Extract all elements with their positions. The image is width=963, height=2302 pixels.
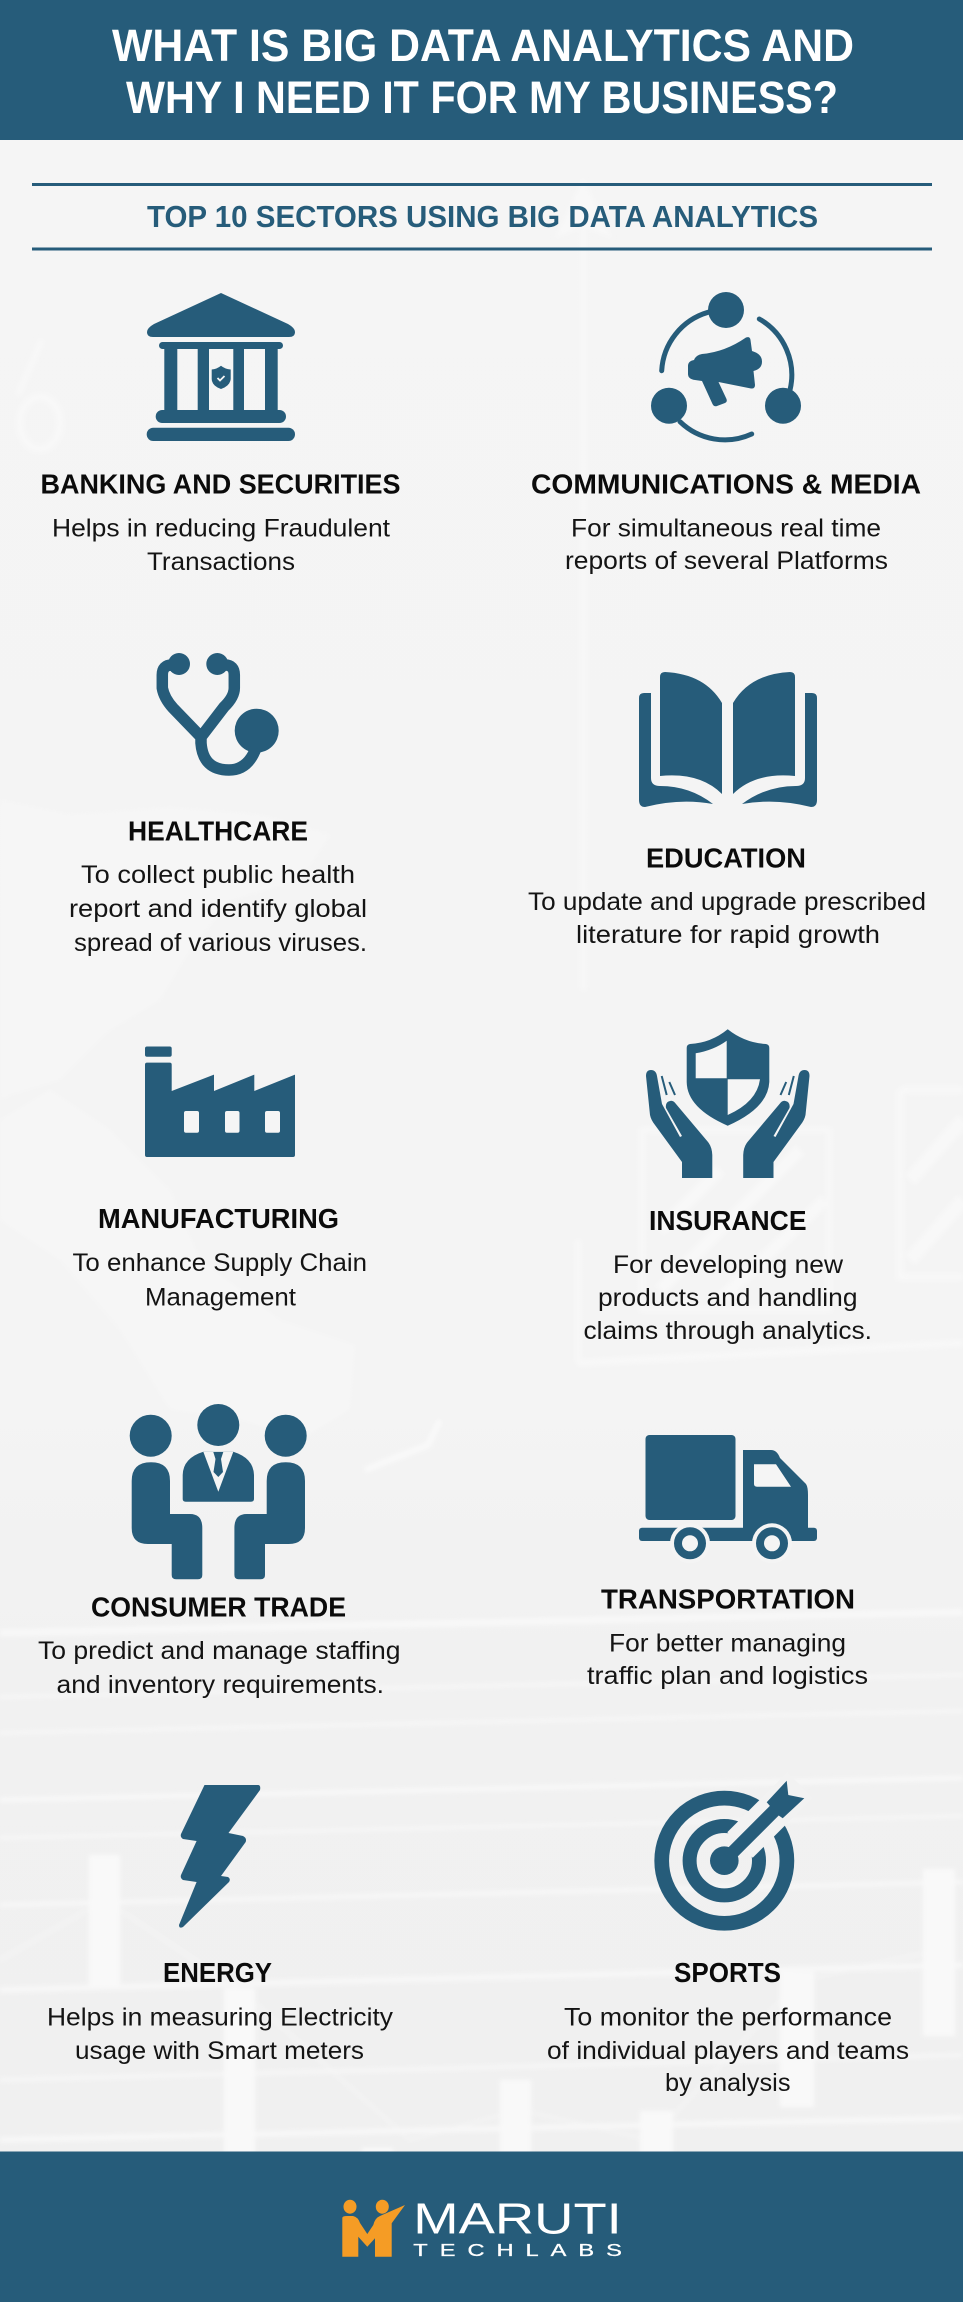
- description: traffic plan and logistics: [587, 1662, 868, 1690]
- title: [112, 20, 854, 123]
- description: To predict and manage staffing: [38, 1637, 400, 1665]
- description: spread of various viruses.: [74, 929, 367, 957]
- panel: communications and media: [531, 292, 921, 575]
- description: [565, 514, 888, 575]
- description: products and handling: [598, 1284, 858, 1312]
- icon: lightning bolt: [179, 1785, 260, 1928]
- icon: target with arrow: [662, 1781, 804, 1923]
- description: reports of several Platforms: [565, 547, 888, 575]
- heading: SPORTS: [674, 1957, 781, 1988]
- icon: stethoscope: [162, 653, 279, 770]
- description: For developing new: [613, 1251, 844, 1279]
- icon: shield held by hands: [646, 1029, 810, 1178]
- description: claims through analytics.: [584, 1317, 872, 1345]
- wordmark: MARUTI: [413, 2194, 622, 2243]
- panel: insurance: [584, 1029, 872, 1345]
- section heading with rules: TOP 10 SECTORS USING BIG DATA ANALYTICS: [147, 199, 818, 234]
- description: of individual players and teams: [547, 2037, 909, 2065]
- heading: TRANSPORTATION: [601, 1584, 855, 1615]
- description: [38, 1637, 400, 1699]
- icon: orange figures: [342, 2200, 405, 2257]
- icon: bank: [147, 293, 295, 441]
- icon: megaphone in network ring: [651, 292, 801, 440]
- description: literature for rapid growth: [576, 921, 880, 949]
- heading: INSURANCE: [649, 1205, 806, 1236]
- header banner: [0, 0, 963, 140]
- description: To update and upgrade prescribed: [528, 888, 926, 916]
- panel: transportation: [587, 1435, 868, 1690]
- description: Transactions: [147, 548, 295, 576]
- panel: manufacturing: [72, 1046, 367, 1312]
- icon: open book: [639, 672, 817, 807]
- description: For better managing: [609, 1630, 846, 1658]
- description: [47, 2004, 394, 2065]
- wordmark subline: TECHLABS: [413, 2241, 622, 2260]
- section heading with rules: [32, 183, 932, 250]
- description: [69, 861, 367, 957]
- heading: ENERGY: [163, 1957, 272, 1988]
- heading: COMMUNICATIONS & MEDIA: [531, 468, 921, 500]
- heading: EDUCATION: [646, 842, 806, 874]
- description: and inventory requirements.: [56, 1671, 384, 1699]
- description: To collect public health: [81, 861, 355, 889]
- panel: healthcare: [69, 653, 367, 957]
- heading: MANUFACTURING: [98, 1203, 339, 1234]
- description: Helps in measuring Electricity: [47, 2004, 394, 2032]
- description: [587, 1630, 868, 1690]
- heading: BANKING AND SECURITIES: [40, 468, 400, 500]
- description: [72, 1249, 367, 1312]
- description: report and identify global: [69, 895, 367, 923]
- panel: education: [528, 672, 926, 949]
- description: Management: [145, 1284, 296, 1312]
- panel: consumer trade: [38, 1404, 400, 1699]
- description: To monitor the performance: [564, 2004, 892, 2032]
- description: To enhance Supply Chain: [72, 1249, 367, 1277]
- title: WHAT IS BIG DATA ANALYTICS AND: [112, 20, 854, 71]
- logo: Maruti Techlabs: [342, 2194, 622, 2260]
- description: [52, 514, 390, 576]
- description: For simultaneous real time: [571, 514, 881, 542]
- title: WHY I NEED IT FOR MY BUSINESS?: [126, 72, 838, 123]
- heading: CONSUMER TRADE: [91, 1592, 346, 1623]
- description: by analysis: [665, 2069, 790, 2097]
- description: [547, 2004, 909, 2097]
- panel: energy: [47, 1785, 394, 2065]
- description: [584, 1251, 872, 1345]
- panel: banking and securities: [40, 293, 400, 576]
- footer banner: [0, 2152, 963, 2302]
- description: usage with Smart meters: [75, 2037, 364, 2065]
- panel: sports: [547, 1781, 909, 2097]
- description: Helps in reducing Fraudulent: [52, 514, 390, 542]
- icon: factory: [145, 1046, 295, 1157]
- description: [528, 888, 926, 949]
- heading: HEALTHCARE: [128, 816, 308, 846]
- icon: business meeting: [130, 1404, 307, 1579]
- icon: delivery truck: [639, 1435, 817, 1563]
